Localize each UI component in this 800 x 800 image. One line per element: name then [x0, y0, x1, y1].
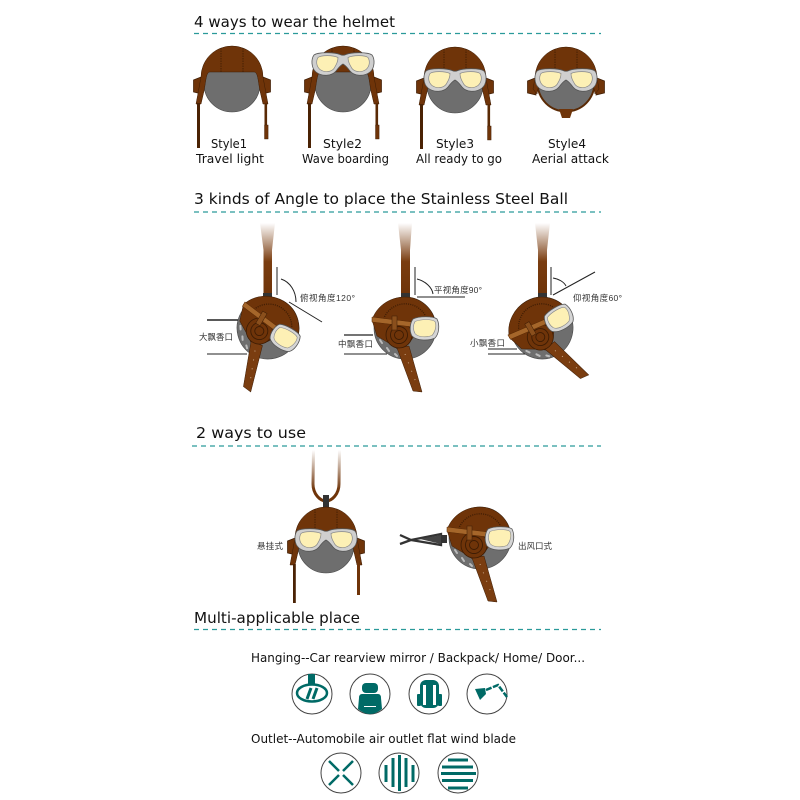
helmet style 4 [528, 47, 604, 118]
style captions [195, 137, 609, 166]
angle view 60 degrees: 小飘香口 [470, 338, 505, 348]
angle view 90 degrees: 平视角度90° [434, 285, 482, 295]
icon: vertical blades [379, 753, 419, 793]
style captions: Wave boarding [302, 152, 389, 166]
air outlet helmet [400, 507, 552, 602]
angle view 120 degrees: 大飘香口 [199, 332, 233, 342]
helmet style 2 [304, 46, 382, 148]
style captions: Style4 [548, 137, 586, 151]
angle view 90 degrees [338, 223, 482, 392]
style captions: All ready to go [416, 152, 502, 166]
heading: 3 kinds of angle: 3 kinds of Angle to place the Stainless Steel Ball [194, 190, 568, 208]
icon: backpack [409, 674, 449, 714]
angle view 60 degrees [470, 223, 622, 400]
hanging helmet [257, 450, 364, 603]
icon: door lamp [467, 674, 507, 714]
text: outlet places: Outlet--Automobile air outlet flat wind blade [251, 732, 516, 746]
hanging helmet: 悬挂式 [257, 541, 283, 551]
style captions: Travel light [195, 152, 264, 166]
icon: horizontal blades [438, 753, 478, 793]
heading: 4 ways to wear the helmet: 4 ways to wear the helmet [194, 13, 395, 31]
angle view 120 degrees [199, 223, 355, 400]
heading: multi-applicable place: Multi-applicable place [194, 609, 360, 627]
helmet style 1 [194, 46, 270, 148]
heading: 2 ways to use: 2 ways to use [196, 424, 306, 442]
angle view 60 degrees: 仰视角度60° [573, 293, 622, 303]
icon: car seat [350, 674, 390, 714]
style captions: Aerial attack [532, 152, 609, 166]
text: hanging places: Hanging--Car rearview mirror / Backpack/ Home/ Door... [251, 651, 585, 665]
helmet style 3 [416, 47, 494, 149]
angle view 120 degrees: 俯视角度120° [300, 293, 355, 303]
angle view 90 degrees: 中飘香口 [338, 339, 373, 349]
air outlet helmet: 出风口式 [518, 541, 552, 551]
icon: car mirror [292, 674, 332, 714]
style captions: Style3 [436, 137, 474, 151]
icon: cross blades [321, 753, 361, 793]
style captions: Style1 [211, 137, 247, 151]
style captions: Style2 [323, 137, 362, 151]
